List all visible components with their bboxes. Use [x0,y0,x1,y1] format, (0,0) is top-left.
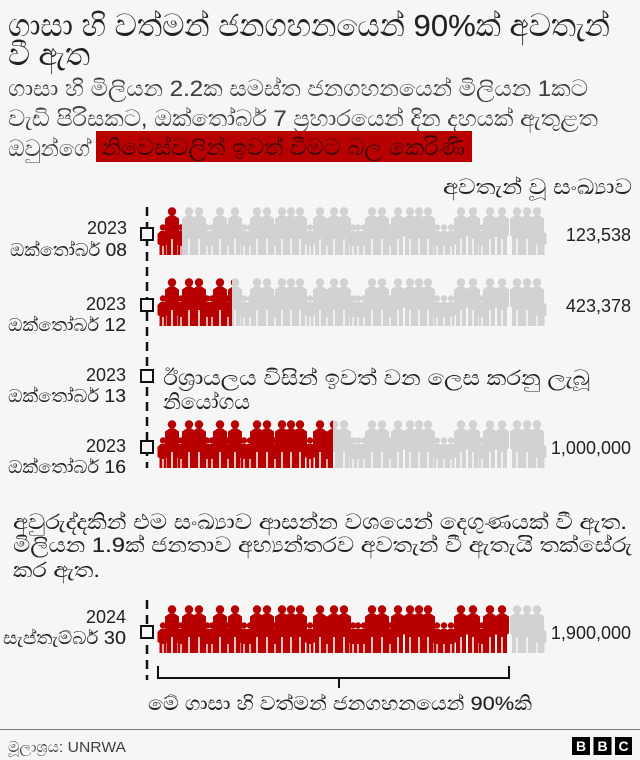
subtitle [8,76,599,163]
footer rule [0,728,640,730]
row: 8 October 2023: 2023 [87,218,127,238]
paragraph: කර ඇත. [13,559,100,584]
BBC logo: C [618,738,629,754]
row: 16 October 2023: ඔක්තෝබර් 16 [8,457,126,477]
title: වී ඇත [8,37,90,75]
row: 13 October 2023: ඊශ්‍රායලය විසින් ඉවත් වන ලෙස කරනු ලැබූ [163,367,590,392]
bracket label: මේ ගාසා හි වත්මන් ජනගහනයෙන් 90%කි [148,692,532,715]
source: මූලාශ්‍රය: UNRWA [8,739,126,757]
highlighted phrase: නිවෙස්වලින් ඉවත් වීමට බල කෙරිණි [102,134,465,161]
row: 16 October 2023: 1,000,000 [551,438,631,458]
paragraph: මිලියන 1.9ක් ජනතාව අභ්‍යන්තරව අවතැන් වී ඇතැයි තක්සේරු [13,534,632,559]
title [8,8,610,75]
BBC logo: B [597,738,608,754]
row: 8 October 2023 [10,207,631,260]
paragraph [13,511,632,584]
row: 30 September 2024: 1,900,000 [551,623,631,643]
row: 8 October 2023: 123,538 [566,225,631,245]
row: 8 October 2023: ඔක්තෝබර් 08 [10,240,127,260]
row: 12 October 2023 [8,278,631,335]
row: 13 October 2023 [8,365,590,414]
row: 16 October 2023: 2023 [86,436,126,456]
title: ගාසා හි වත්මන් ජනගහනයෙන් 90%ක් අවතැන් [8,8,610,46]
row: 12 October 2023: 423,378 [566,296,631,316]
row: 13 October 2023: ඔක්තෝබර් 13 [8,386,126,406]
row: 12 October 2023: ඔක්තෝබර් 12 [8,315,126,335]
timeline axis [146,207,148,680]
subtitle: ගාසා හි මිලියන 2.2ක සමස්ත ජනගහනයෙන් මිලියන 1කට [8,76,588,102]
row: 12 October 2023: 2023 [86,294,126,314]
column header: අවතැන් වූ සංඛ්‍යාව [443,176,632,201]
paragraph: අවුරුද්දකින් එම සංඛ්‍යාව ආසන්න වශයෙන් දෙගුණයක් වී ඇත. [13,511,627,536]
subtitle: වැඩි පිරිසකට, ඔක්තෝබර් 7 ප්‍රහාරයෙන් දින දහයක් ඇතුළත [8,105,599,133]
row: 16 October 2023 [8,420,631,477]
bracket [158,666,509,688]
BBC logo [572,737,632,755]
row: 30 September 2024: 2024 [86,607,126,627]
row: 30 September 2024 [3,605,631,653]
row: 13 October 2023: නියෝගය [163,391,250,414]
row: 30 September 2024: සැප්තැම්බර් 30 [3,628,126,648]
subtitle: ඔවුන්ගේ [8,136,92,163]
BBC logo: B [576,738,586,754]
row: 13 October 2023: 2023 [86,365,126,385]
